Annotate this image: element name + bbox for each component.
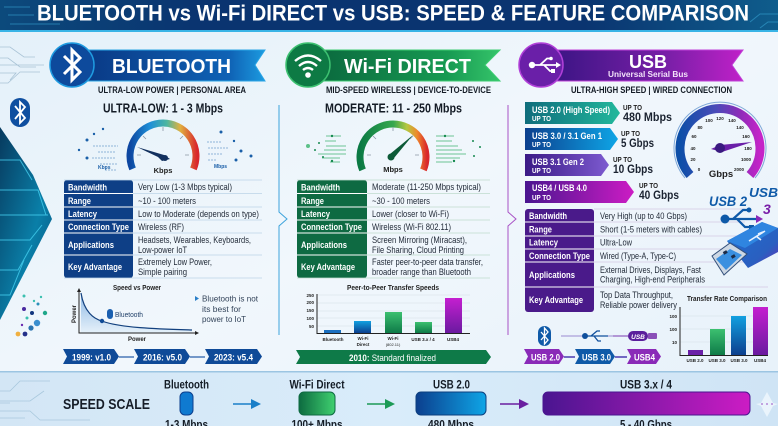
speed tier: usb 2.0 (525, 102, 672, 124)
table: wi-fi direct: Latency (301, 209, 331, 220)
speed heading: ULTRA-LOW: 1 - 3 Mbps (103, 102, 223, 116)
table: wi-fi direct: Moderate (11-250 Mbps typical) (372, 182, 481, 192)
gauge: usb: 140 (736, 125, 744, 130)
table: wi-fi direct: Applications (301, 240, 347, 251)
subtitle: MID-SPEED WIRELESS | DEVICE-TO-DEVICE (326, 85, 491, 95)
flow: usb versions: USB 3.0 (582, 352, 611, 364)
subtitle: ULTRA-LOW POWER | PERSONAL AREA (98, 85, 246, 95)
gauge: usb: 180 (744, 146, 752, 151)
table: bluetooth: Wireless (RF) (138, 222, 184, 232)
speed tier: usb 3.0: UP TO (621, 129, 640, 138)
chart: peer-to-peer transfer speeds: Bluetooth (322, 337, 344, 342)
banner: wi-fi direct (286, 43, 500, 87)
chart: speed vs power: Speed vs Power (113, 285, 161, 292)
chart: peer-to-peer transfer speeds: 200 (306, 300, 314, 305)
chart: speed vs power (72, 285, 199, 343)
chart: transfer rate comparison: USB4 (754, 358, 766, 363)
icons: connector row: USB (631, 334, 645, 341)
table: bluetooth: Headsets, Wearables, Keyboards, (138, 235, 251, 245)
table: wi-fi direct: Wireless (Wi-Fi 802.11) (372, 222, 451, 232)
flow: usb versions (524, 349, 661, 364)
gauge: usb: 0 (698, 167, 701, 172)
scale item: usb 2.0 (416, 378, 486, 426)
panel: speed scale (0, 371, 778, 426)
table: usb: Short (1-5 meters with cables) (600, 224, 702, 234)
chart: transfer rate comparison: Transfer Rate Comparison (687, 294, 767, 303)
table: wi-fi direct: Connection Type (301, 222, 362, 233)
flow: usb versions: USB4 (634, 352, 656, 364)
timeline: bluetooth versions: 2016: v5.0 (143, 352, 182, 364)
scale item: usb 3.x / 4 (543, 378, 750, 426)
decorative data dots (16, 294, 47, 336)
chart: peer-to-peer transfer speeds: 100 (306, 316, 314, 321)
chart: peer-to-peer transfer speeds: Direct (357, 342, 370, 347)
table: wi-fi direct: Screen Mirroring (Miracast), (372, 235, 467, 245)
chart: peer-to-peer transfer speeds: 50 (309, 324, 314, 329)
scale item: usb 3.x / 4: USB 3.x / 4 (620, 378, 672, 392)
timeline: standard finalized: 2010: Standard finalized (349, 353, 436, 364)
chart: peer-to-peer transfer speeds: USB 3.x / 4 (411, 337, 435, 342)
table: usb: Bandwidth (529, 211, 567, 222)
speed tier: usb 2.0: UP TO (623, 103, 642, 112)
gauge: bluetooth: Kbps (154, 166, 172, 175)
gauge: bluetooth: Mbps (214, 164, 227, 170)
table: bluetooth: Low to Moderate (depends on type) (138, 209, 259, 219)
speed tier: usb 3.1 gen 2: USB 3.1 Gen 2 (532, 157, 584, 168)
speed tier: usb 2.0: UP TO (532, 114, 551, 123)
chart: transfer rate comparison: USB 3.0 (730, 358, 748, 363)
chart: speed vs power: Bluetooth (115, 312, 143, 319)
gauge: usb: 60 (691, 134, 697, 139)
speed tier: usb4 (525, 181, 679, 203)
gauge: usb: 80 (697, 125, 703, 130)
gauge: usb (674, 102, 766, 180)
gauge: wi-fi direct (306, 124, 481, 174)
timeline: bluetooth versions: 1999: v1.0 (72, 352, 111, 364)
arrow: blue (233, 399, 261, 409)
speed tier: usb 3.1 gen 2: UP TO (532, 166, 551, 175)
banner: wi-fi direct: Wi-Fi DIRECT (344, 55, 471, 78)
table: bluetooth: Low-power IoT (138, 245, 187, 255)
chart: peer-to-peer transfer speeds: Wi-Fi (358, 336, 368, 341)
illustration: usb logos and stick: USB 2 (709, 193, 747, 209)
callout: bluetooth note: Bluetooth is not (202, 294, 259, 304)
banner: usb: USB (629, 52, 667, 72)
banner: usb (519, 43, 743, 87)
chart: peer-to-peer transfer speeds: 150 (306, 308, 314, 313)
speed tier: usb 3.1 gen 2 (525, 154, 653, 176)
table: usb: Applications (529, 270, 575, 281)
decorative sparkle (756, 392, 778, 417)
chart: peer-to-peer transfer speeds: 250 (306, 293, 314, 298)
speed tier: usb 3.0: 5 Gbps (621, 136, 654, 150)
gauge: bluetooth (78, 123, 252, 175)
chart: peer-to-peer transfer speeds (306, 285, 470, 347)
panel: wi-fi direct (286, 43, 500, 364)
banner: usb: Universal Serial Bus (608, 69, 688, 79)
gauge: usb: 1000 (741, 157, 752, 162)
header band with title (0, 0, 778, 32)
flow: usb versions: USB 2.0 (531, 352, 560, 364)
table: wi-fi direct: ~30 - 100 meters (372, 196, 430, 206)
table: usb: Latency (529, 238, 559, 248)
scale item: usb 2.0: USB 2.0 (433, 378, 470, 392)
chart: peer-to-peer transfer speeds: USB4 (447, 337, 459, 342)
table: bluetooth: Connection Type (68, 222, 129, 233)
arrow: purple (500, 399, 529, 409)
scale item: bluetooth (164, 378, 209, 426)
table: bluetooth (64, 180, 262, 278)
table: usb: Wired (Type-A, Type-C) (600, 251, 676, 261)
chart: peer-to-peer transfer speeds: (802.11) (386, 342, 401, 347)
chart: transfer rate comparison (669, 294, 768, 363)
table: usb: Range (529, 224, 552, 236)
speed tier: usb4: UP TO (532, 193, 551, 202)
left circuit panel (0, 47, 52, 320)
gauge: usb: 120 (716, 116, 724, 121)
chart: speed vs power: Power (72, 304, 78, 323)
timeline: bluetooth versions: 2023: v5.4 (214, 352, 254, 364)
callout: bluetooth note: power to IoT (202, 314, 246, 324)
speed tier: usb 3.0: UP TO (532, 140, 551, 149)
table: bluetooth: Simple pairing (138, 267, 187, 277)
arrow: green (367, 399, 395, 409)
callout: bluetooth note: its best for (202, 304, 241, 314)
banner: bluetooth (50, 43, 265, 87)
table: wi-fi direct: File Sharing, Cloud Printing (372, 245, 464, 255)
panel: bluetooth (50, 43, 265, 364)
chart: peer-to-peer transfer speeds: Wi-Fi (388, 336, 398, 341)
chart: peer-to-peer transfer speeds: Peer-to-Peer Transfer Speeds (347, 285, 439, 292)
speed tier: usb4: USB4 / USB 4.0 (532, 183, 587, 194)
table: wi-fi direct (297, 180, 490, 278)
illustration: usb logos and stick (709, 185, 778, 275)
divider arrow: blue (279, 105, 287, 335)
gauge: usb: 40 (690, 146, 696, 151)
table: usb: Key Advantage (529, 295, 583, 306)
table: usb: Very High (up to 40 Gbps) (600, 211, 687, 221)
scale item: wi-fi direct: Wi-Fi Direct (290, 378, 345, 392)
speed heading: MODERATE: 11 - 250 Mbps (325, 102, 462, 116)
table: bluetooth: Very Low (1-3 Mbps typical) (138, 182, 232, 192)
table: bluetooth: Applications (68, 240, 114, 251)
table: wi-fi direct: broader range than Bluetooth (372, 267, 471, 277)
gauge: bluetooth: Kbps (98, 165, 111, 171)
speed tier: usb 2.0: USB 2.0 (High Speed) (532, 105, 610, 116)
gauge: usb: Gbps (709, 169, 733, 180)
gauge: usb: 20 (690, 157, 696, 162)
icons: connector row (538, 326, 657, 346)
speed tier: usb 2.0: 480 Mbps (623, 110, 672, 124)
table: usb: Reliable power delivery (600, 300, 677, 310)
chart: transfer rate comparison: USB 3.0 (708, 358, 726, 363)
table: wi-fi direct: Key Advantage (301, 262, 355, 273)
speed tier: usb 3.0 (525, 128, 654, 150)
banner: bluetooth: BLUETOOTH (112, 55, 231, 78)
divider arrow: purple (508, 105, 516, 335)
panel: usb (519, 43, 778, 364)
table: bluetooth: Range (68, 196, 91, 207)
chart: speed vs power: Power (128, 337, 147, 343)
table: bluetooth: Bandwidth (68, 182, 107, 194)
speed tier: usb 3.1 gen 2: 10 Gbps (613, 162, 653, 176)
gauge: usb: 160 (742, 134, 750, 139)
scale item: wi-fi direct (290, 378, 345, 426)
speed tier: usb4: 40 Gbps (639, 188, 679, 202)
table: usb: Ultra-Low (600, 238, 632, 248)
subtitle: ULTRA-HIGH SPEED | WIRED CONNECTION (571, 85, 732, 95)
illustration: usb logos and stick: 3 (763, 201, 771, 217)
table: wi-fi direct: Bandwidth (301, 182, 340, 194)
speed tier: usb 3.1 gen 2: UP TO (613, 155, 632, 164)
gauge: wi-fi direct: Mbps (383, 165, 403, 174)
gauge: usb: 140 (728, 118, 736, 123)
table: bluetooth: Latency (68, 209, 98, 220)
table: usb: External Drives, Displays, Fast (600, 265, 701, 275)
callout: bluetooth note (195, 294, 259, 324)
table: bluetooth: ~10 - 100 meters (138, 196, 196, 206)
table: bluetooth: Key Advantage (68, 262, 122, 273)
illustration: usb logos and stick: USB (749, 185, 778, 200)
table: wi-fi direct: Lower (closer to Wi-Fi) (372, 209, 449, 219)
table: wi-fi direct: Range (301, 196, 324, 207)
timeline: standard finalized (296, 350, 491, 364)
scale item: bluetooth: Bluetooth (164, 378, 209, 392)
chart: transfer rate comparison: 10 (672, 340, 677, 345)
table: usb: Connection Type (529, 251, 590, 262)
timeline: bluetooth versions (63, 349, 262, 364)
chart: transfer rate comparison: 100 (669, 314, 677, 319)
heading: speed scale: SPEED SCALE (63, 396, 150, 413)
chart: transfer rate comparison: 100 (669, 327, 677, 332)
speed tier: usb 3.0: USB 3.0 / 3.1 Gen 1 (532, 131, 603, 142)
table: wi-fi direct: Faster peer-to-peer data transfer, (372, 257, 483, 267)
gauge: usb: 100 (705, 118, 713, 123)
table: usb (525, 209, 768, 312)
table: bluetooth: Extremely Low Power, (138, 257, 212, 267)
speed tier: usb4: UP TO (639, 181, 658, 190)
table: usb: Top Data Throughput, (600, 290, 673, 300)
table: usb: Charging, High-end Peripherals (600, 274, 705, 284)
icon: small bluetooth badge (10, 98, 30, 127)
gauge: usb: 2000 (734, 167, 745, 172)
chart: transfer rate comparison: USB 2.0 (686, 358, 704, 363)
